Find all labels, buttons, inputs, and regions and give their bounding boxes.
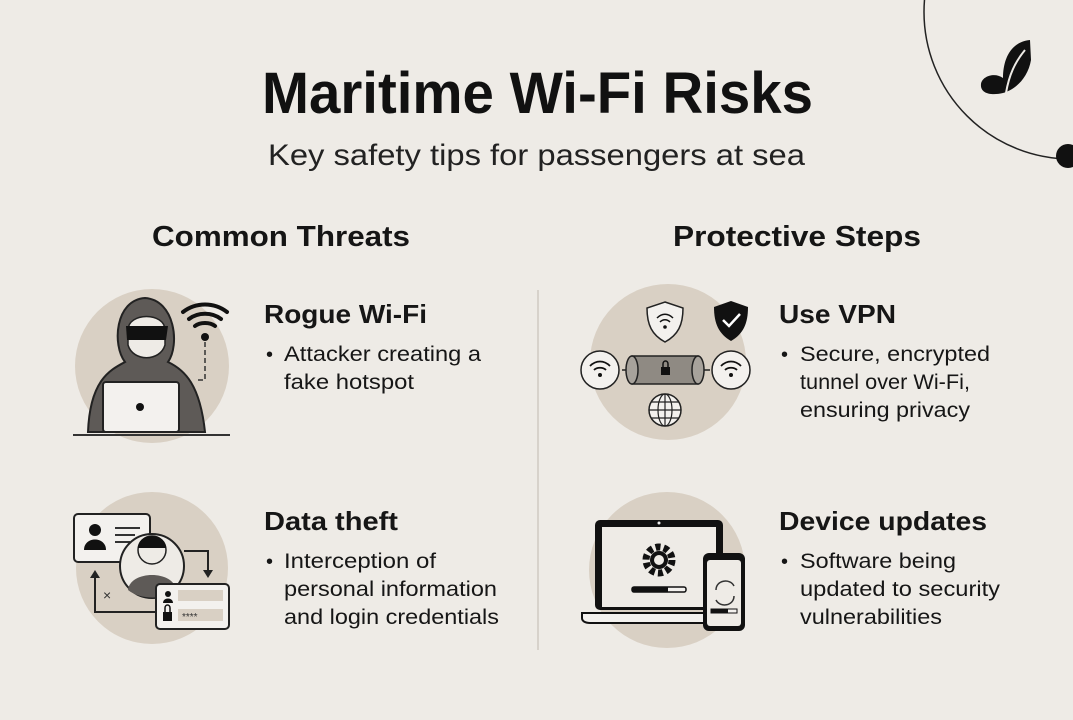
text: Device updates: vulnerabilities (800, 606, 942, 629)
text: Device updates: updated to security (800, 578, 1001, 601)
title: Maritime Wi-Fi Risks (262, 61, 813, 126)
text: Data theft: and login credentials (284, 606, 499, 629)
icon: data theft: × (103, 587, 111, 603)
text: Data theft: Data theft (264, 506, 398, 536)
text: Data theft: Interception of (284, 550, 436, 573)
text: Data theft (264, 506, 499, 629)
text: Device updates (779, 506, 1001, 629)
subtitle: Key safety tips for passengers at sea (268, 139, 805, 172)
text: Rogue Wi-Fi: • (266, 344, 273, 366)
icon: hooded hacker with laptop (73, 289, 230, 443)
icon: device updates (582, 492, 745, 648)
text: Data theft: personal information (284, 578, 497, 601)
text: Device updates: Software being (800, 550, 956, 573)
text: Rogue Wi-Fi: Rogue Wi-Fi (264, 299, 427, 329)
text: Use VPN: ensuring privacy (800, 399, 971, 422)
heading: Protective Steps: Protective Steps (673, 221, 921, 253)
heading: Common Threats: Common Threats (152, 221, 410, 253)
text: Device updates: Device updates (779, 506, 987, 536)
text: Rogue Wi-Fi: Attacker creating a (284, 343, 481, 366)
logo: arc with leaf (924, 0, 1073, 168)
text: Use VPN: • (781, 344, 788, 366)
icon: VPN tunnel (581, 284, 750, 440)
icon: data theft: **** (182, 612, 198, 623)
text: Device updates: • (781, 551, 788, 573)
text: Rogue Wi-Fi (264, 299, 481, 394)
text: Use VPN: Secure, encrypted (800, 343, 990, 366)
text: Rogue Wi-Fi: fake hotspot (284, 371, 414, 394)
text: Use VPN: tunnel over Wi-Fi, (800, 371, 970, 394)
icon: data theft (74, 492, 229, 644)
text: Use VPN (779, 299, 990, 422)
text: Use VPN: Use VPN (779, 299, 896, 329)
text: Data theft: • (266, 551, 273, 573)
